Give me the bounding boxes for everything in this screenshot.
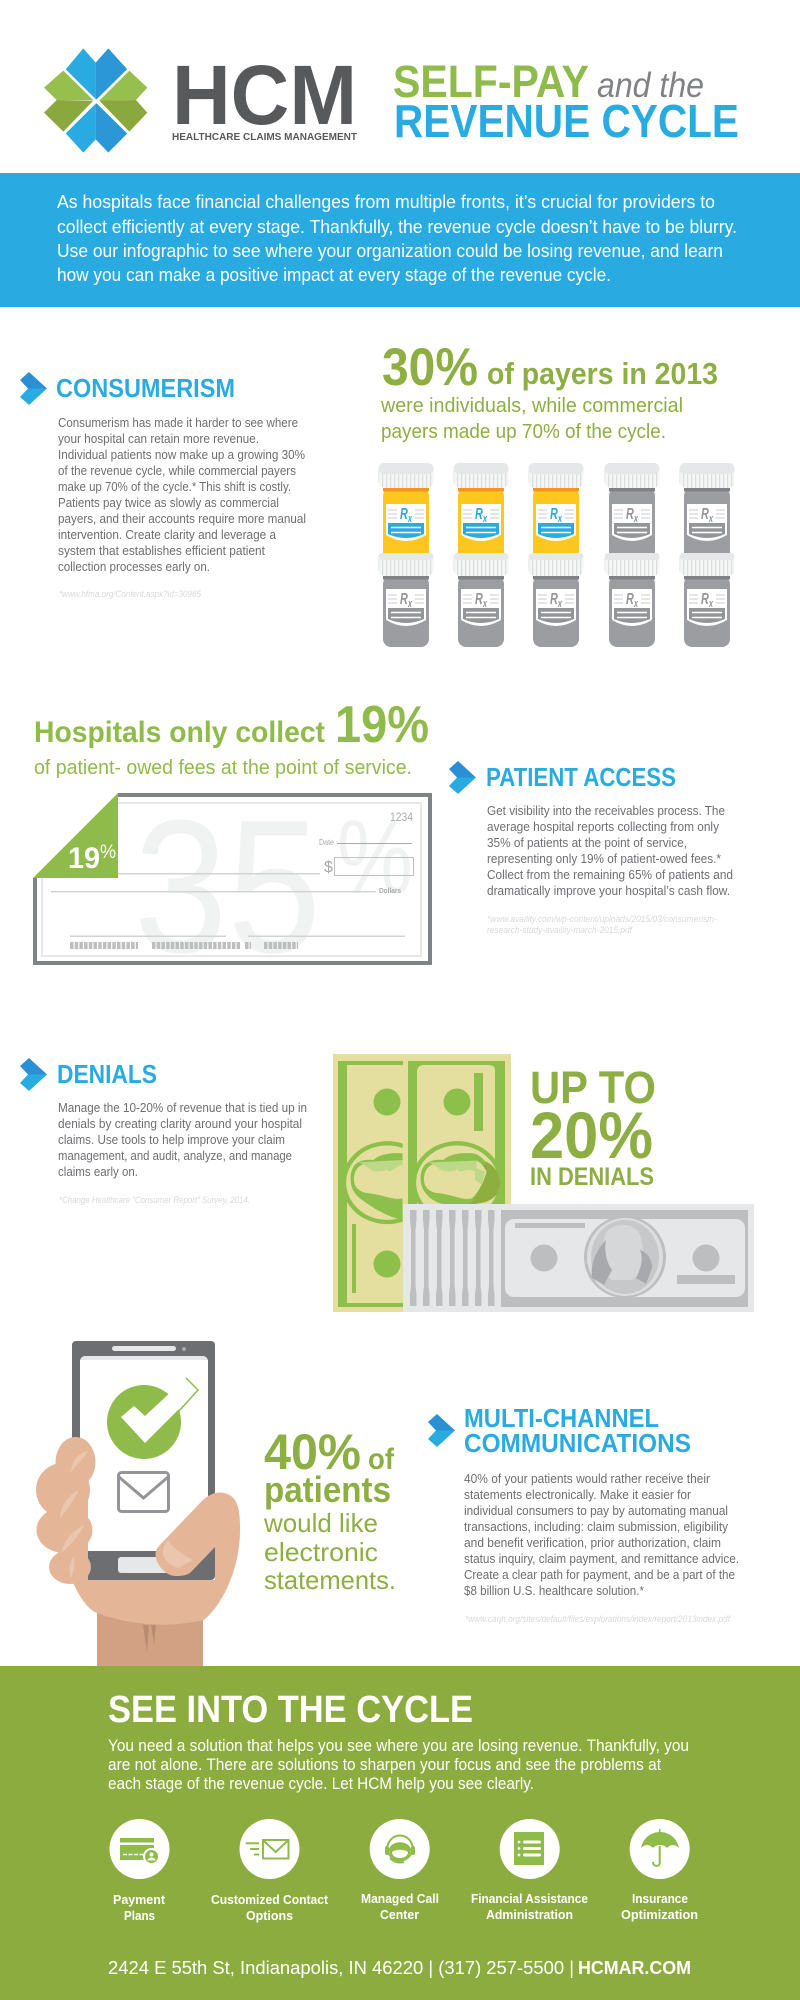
- date field: Date: [319, 838, 334, 847]
- stat: 40% of patients: electronic: [264, 1537, 378, 1567]
- text block: consumerism: Consumerism has made it harder to see where: [58, 415, 298, 430]
- phone: [72, 1341, 215, 1580]
- heading: multi-channel communications: MULTI-CHANNEL: [464, 1403, 659, 1433]
- text block: see into the cycle: are not alone. There are solutions to sharpen your focus and see the problems at: [108, 1756, 661, 1774]
- stat: 30% of payers: payers made up 70% of the cycle.: [381, 421, 666, 443]
- icon: consumerism chevron: [20, 372, 47, 405]
- source: patient access: *www.availity.com/wp-content/uploads/2015/03/consumerism-: [487, 914, 717, 925]
- stat: 30% of payers: [380, 338, 718, 443]
- stat: 30% of payers: of payers in 2013: [487, 356, 718, 391]
- stat: hospitals only collect 19%: of patient- owed fees at the point of service.: [34, 757, 412, 779]
- stat: up to 20% in denials: 20%: [530, 1098, 653, 1172]
- label: customized contact options: Customized Contact: [211, 1892, 329, 1907]
- text block: denials: claims early on.: [58, 1164, 138, 1179]
- label: payment plans: Plans: [124, 1908, 155, 1923]
- bottle row 1: R: [701, 506, 713, 523]
- text block: patient access: average hospital reports collecting from only: [487, 819, 719, 834]
- label: payment plans: Payment: [113, 1892, 166, 1907]
- logo wordmark: HEALTHCARE CLAIMS MANAGEMENT: [172, 132, 357, 143]
- text block: multi-channel: status inquiry, claim payment, and remittance advice.: [464, 1551, 739, 1566]
- stat: up to 20% in denials: [530, 1062, 656, 1191]
- label: financial assistance administration: Administration: [486, 1907, 573, 1922]
- stat: 40% of patients: patients: [264, 1469, 391, 1510]
- bottle row 2: [378, 553, 734, 647]
- label: customized contact options: Options: [246, 1908, 293, 1923]
- stat: 40% of patients: [263, 1424, 396, 1595]
- watermark 35%: %: [337, 799, 413, 916]
- footer contact line: 2424 E 55th St, Indianapolis, IN 46220 | (317) 257-5500 |: [108, 1958, 574, 1978]
- source: consumerism: *www.hfma.org/Content.aspx?id=30965: [59, 589, 202, 600]
- text block: consumerism: intervention. Create clarity and leverage a: [58, 527, 277, 542]
- check number: 1234: [390, 810, 413, 824]
- bottle row 1: x: [708, 513, 714, 525]
- green corner: 19%: 19: [68, 842, 100, 875]
- icon: green check: [107, 1378, 198, 1459]
- text block: multi-channel: individual consumers to pay by automating manual: [464, 1503, 728, 1518]
- text block: multi-channel: Create a clear path for payment, and be a part of the: [464, 1567, 735, 1582]
- text block: consumerism: your hospital can retain more revenue.: [58, 431, 259, 446]
- bottle row 2: x: [633, 598, 639, 610]
- text block: denials: denials by creating clarity around your hospital: [58, 1116, 302, 1131]
- source: patient access: [487, 914, 717, 936]
- icon: envelope: [118, 1472, 168, 1512]
- bottle row 1: R: [626, 506, 638, 523]
- text block: consumerism: make up 70% of the cycle.* This shift is costly.: [58, 479, 291, 494]
- title: SELF-PAY: [393, 56, 589, 107]
- bottle row 1: x: [482, 513, 488, 525]
- illustration: gray bill: [403, 1204, 754, 1312]
- stacked bill edges: [410, 1210, 494, 1306]
- icon: patient access chevron: [449, 761, 476, 794]
- bottle row 1: R: [400, 506, 412, 523]
- text block: patient access: representing only 19% of patient-owed fees.*: [487, 851, 721, 866]
- stat: 40% of patients: statements.: [264, 1565, 396, 1595]
- label: insurance optimization: Optimization: [621, 1907, 698, 1922]
- icon: payment plans: [110, 1819, 170, 1879]
- text block: multi-channel: $8 billion U.S. healthcare solution.*: [464, 1583, 644, 1598]
- stat: 30% of payers: were individuals, while commercial: [380, 395, 683, 417]
- text block: multi-channel: statements electronically. Make it easier for: [464, 1487, 692, 1502]
- text block: multi-channel: [464, 1471, 739, 1598]
- heading: multi-channel communications: COMMUNICATIONS: [464, 1428, 691, 1458]
- icon: denials chevron: [20, 1058, 47, 1091]
- wrist: [97, 1600, 203, 1667]
- heading: multi-channel communications: [464, 1403, 691, 1458]
- title: [393, 56, 739, 147]
- icon: managed call center: [370, 1819, 430, 1879]
- text block: see into the cycle: [108, 1737, 689, 1793]
- heading: consumerism: CONSUMERISM: [56, 373, 235, 403]
- label: financial assistance administration: [471, 1891, 588, 1922]
- bottle row 1: R: [550, 506, 562, 523]
- stat: up to 20% in denials: UP TO: [530, 1062, 656, 1113]
- nail highlights: [60, 1451, 193, 1578]
- stat: hospitals only collect 19%: [34, 696, 429, 779]
- bottle row 2: x: [407, 598, 413, 610]
- text block: patient access: Get visibility into the receivables process. The: [487, 803, 725, 818]
- bottle row 1: R: [475, 506, 487, 523]
- text block: multi-channel: transactions, including: claim submission, eligibility: [464, 1519, 728, 1534]
- panel: intro band: collect efficiently at every stage. Thankfully, the revenue cycle doesn’t have to be blurry.: [57, 217, 737, 237]
- seal circles: [374, 1088, 400, 1116]
- logo: HCM emblem: [44, 48, 147, 153]
- text block: patient access: dramatically improve your hospital’s cash flow.: [487, 883, 730, 898]
- text block: multi-channel: 40% of your patients would rather receive their: [464, 1471, 711, 1486]
- panel: see into the cycle: [0, 1666, 800, 2000]
- stat: up to 20% in denials: IN DENIALS: [530, 1163, 654, 1191]
- stat: 40% of patients: 40%: [264, 1424, 361, 1480]
- source: denials: *Change Healthcare “Consumer Report” Survey, 2014.: [59, 1195, 250, 1206]
- bottle row 2: x: [557, 598, 563, 610]
- portraits: [344, 1143, 501, 1222]
- date field: [319, 838, 412, 847]
- amount box: $: [324, 859, 333, 876]
- stat: hospitals only collect 19%: 19%: [335, 696, 429, 754]
- bottle row 2: R: [475, 591, 487, 608]
- bottle row 2: R: [701, 591, 713, 608]
- text block: patient access: [487, 803, 733, 898]
- label: insurance optimization: Insurance: [632, 1891, 688, 1906]
- bottle row 1: x: [557, 513, 563, 525]
- label: customized contact options: [211, 1892, 329, 1923]
- illustration: green bill: [333, 1054, 511, 1312]
- text block: consumerism: payers, and their accounts require more manual: [58, 511, 306, 526]
- text block: denials: claims. Use tools to help improve your claim: [58, 1132, 285, 1147]
- panel: intro band: [0, 173, 800, 307]
- text block: see into the cycle: each stage of the revenue cycle. Let HCM help you see clearly.: [108, 1775, 534, 1793]
- text block: denials: Manage the 10-20% of revenue that is tied up in: [58, 1100, 307, 1115]
- bottle row 2: R: [626, 591, 638, 608]
- bottle row 2: x: [708, 598, 714, 610]
- icon: customized contact: [240, 1819, 300, 1879]
- text block: patient access: 35% of patients at the point of service,: [487, 835, 687, 850]
- source: multi-channel: *www.caqh.org/sites/default/files/explorations/index/report/2013index.pdf: [465, 1614, 731, 1625]
- illustration: hand holding phone: [36, 1341, 240, 1667]
- bottle row 1: [378, 463, 734, 561]
- bottle row 1: x: [407, 513, 413, 525]
- dollars label: Dollars: [379, 886, 401, 895]
- text block: patient access: Collect from the remaining 65% of patients and: [487, 867, 733, 882]
- stat: 40% of patients: of: [368, 1443, 395, 1476]
- source: patient access: research-study-availity-march-2015.pdf: [487, 925, 633, 936]
- label: managed call center: [361, 1891, 439, 1922]
- text block: denials: [58, 1100, 307, 1179]
- stat: hospitals only collect 19%: Hospitals only collect: [34, 716, 325, 749]
- logo wordmark: HCM: [172, 48, 357, 142]
- panel: intro band: Use our infographic to see where your organization could be losing revenue, and learn: [57, 241, 723, 261]
- bottle row 2: R: [550, 591, 562, 608]
- amount box: [324, 858, 414, 876]
- label: payment plans: [113, 1892, 166, 1923]
- footer contact line: HCMAR.COM: [578, 1958, 691, 1978]
- portrait: [584, 1216, 666, 1298]
- panel: intro band: how you can make a positive impact at every stage of the revenue cycle.: [57, 265, 611, 285]
- green corner: 19%: [33, 793, 118, 878]
- bottle row 2: x: [482, 598, 488, 610]
- icon: multi-channel chevron: [428, 1414, 455, 1447]
- title: and the: [597, 66, 704, 105]
- illustration: check with 35% watermark: [33, 781, 430, 993]
- title: REVENUE CYCLE: [394, 95, 739, 147]
- heading: denials: DENIALS: [57, 1059, 157, 1089]
- palm and thumb: [72, 1493, 240, 1625]
- panel: intro band: As hospitals face financial challenges from multiple fronts, it’s crucial for providers to: [57, 192, 715, 212]
- text block: consumerism: of the revenue cycle, while commercial payers: [58, 463, 296, 478]
- text block: consumerism: Patients pay twice as slowly as commercial: [58, 495, 279, 510]
- text block: consumerism: Individual patients now make up a growing 30%: [58, 447, 305, 462]
- label: managed call center: Center: [380, 1907, 419, 1922]
- green corner: 19%: %: [100, 842, 116, 863]
- label: financial assistance administration: Financial Assistance: [471, 1891, 588, 1906]
- text block: denials: management, and audit, analyze, and manage: [58, 1148, 292, 1163]
- routing numbers: [70, 942, 298, 949]
- stat: 40% of patients: would like: [263, 1508, 378, 1538]
- label: managed call center: Managed Call: [361, 1891, 439, 1906]
- text block: consumerism: system that establishes efficient patient: [58, 543, 265, 558]
- text block: consumerism: [58, 415, 306, 574]
- stat: 30% of payers: 30%: [382, 338, 478, 397]
- text block: see into the cycle: You need a solution that helps you see where you are losing revenue. Thankfully, you: [108, 1737, 689, 1755]
- watermark 35%: 35: [134, 781, 321, 993]
- bottle row 2: R: [400, 591, 412, 608]
- icon: insurance umbrella: [630, 1819, 690, 1879]
- text block: consumerism: collection processes early on.: [58, 559, 210, 574]
- heading: see into the cycle: SEE INTO THE CYCLE: [108, 1689, 473, 1731]
- text block: multi-channel: and benefit verification, prior authorization, claim: [464, 1535, 721, 1550]
- icon: financial assistance: [500, 1819, 560, 1879]
- fingers: [36, 1437, 96, 1584]
- label: insurance optimization: [621, 1891, 698, 1922]
- heading: patient access: PATIENT ACCESS: [486, 762, 676, 792]
- bottle row 1: x: [633, 513, 639, 525]
- chart: pill bottles, 3 of 10 highlighted: [378, 463, 734, 647]
